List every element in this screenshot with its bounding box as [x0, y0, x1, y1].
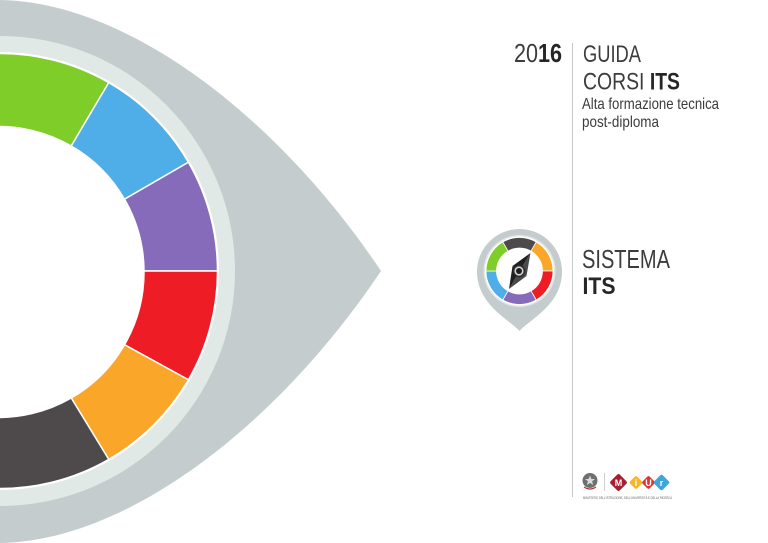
subtitle: post-diploma	[582, 114, 659, 131]
vertical divider line	[572, 43, 573, 497]
segment: purple	[124, 162, 218, 271]
segment: dark grey	[0, 398, 109, 489]
heading: guida corsi its	[583, 41, 680, 96]
subtitle: Alta formazione tecnica	[582, 96, 719, 113]
large white ring backing	[0, 52, 219, 490]
year: 2016	[514, 38, 562, 68]
subtitle	[582, 96, 719, 131]
large grey eye-shaped pin	[0, 0, 381, 543]
segment: green	[0, 53, 109, 146]
heading: sistema its: SISTEMA	[582, 244, 670, 274]
compass ring segments	[486, 238, 553, 304]
logo: republic emblem	[582, 473, 598, 489]
letter R: r	[660, 478, 664, 488]
logo divider	[604, 473, 605, 491]
segment: orange	[71, 345, 188, 459]
letter I: i	[635, 478, 637, 488]
heading: sistema its: ITS	[582, 273, 616, 300]
icon: compass pin	[477, 229, 562, 331]
large light ring	[0, 36, 235, 506]
heading: guida corsi its: CORSI ITS	[583, 68, 680, 96]
heading: sistema its	[582, 244, 670, 300]
segment: blue	[71, 83, 188, 199]
large donut chart	[0, 53, 218, 489]
ministry caption: MINISTERO DELL'ISTRUZIONE, DELL'UNIVERSITÀ E DELLA RICERCA	[583, 496, 672, 500]
letter M: M	[615, 478, 622, 488]
heading: guida corsi its: GUIDA	[583, 41, 641, 68]
letter U: U	[645, 478, 652, 488]
logo: MIUR	[609, 473, 670, 492]
segment: red	[124, 271, 218, 380]
compass needle	[509, 253, 530, 289]
